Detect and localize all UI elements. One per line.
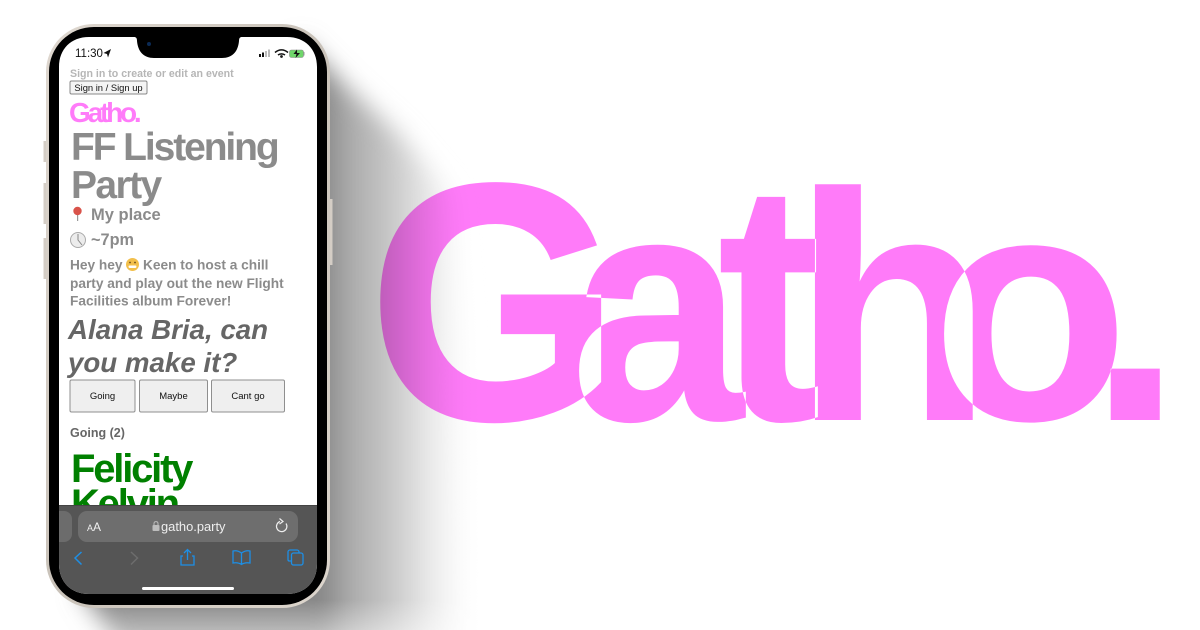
RSVP question: you make it? [66, 347, 237, 378]
going button [70, 380, 135, 412]
cant go button: Cant go [231, 391, 265, 402]
url bar: gatho.party [161, 519, 226, 534]
icon: battery [290, 50, 304, 58]
small Gatho logo: Gatho. [69, 97, 140, 128]
RSVP buttons [70, 380, 284, 412]
icon: forward [131, 552, 138, 564]
Gatho logo wordmark: . [1093, 141, 1178, 482]
phone frame [46, 24, 330, 608]
browser toolbar [40, 505, 317, 595]
event description: Facilities album Forever! [70, 294, 231, 308]
icon: tabs [288, 550, 303, 565]
icon: pin [73, 207, 82, 221]
time row [70, 231, 134, 249]
maybe button: Maybe [159, 391, 188, 402]
icon: location arrow [104, 49, 111, 58]
event title: FF Listening [71, 126, 278, 169]
home indicator [142, 587, 234, 590]
guest names: Kelvin [71, 482, 178, 526]
camera [147, 42, 151, 46]
phone side buttons [44, 141, 332, 279]
RSVP question [66, 314, 268, 378]
web page content [66, 68, 284, 526]
Gatho logo wordmark: a [571, 127, 745, 487]
icon: share [181, 550, 194, 565]
icon: back [75, 552, 82, 564]
url bar [78, 511, 298, 542]
event description [70, 258, 284, 308]
guest names [74, 453, 194, 505]
going button: Going [90, 391, 115, 402]
previous tab edge [59, 511, 72, 542]
Gatho logo wordmark: G [369, 115, 619, 489]
Gatho logo wordmark: o [932, 129, 1129, 488]
event title: Party [71, 164, 162, 207]
icon: grinning emoji [126, 258, 139, 271]
Gatho logo wordmark [360, 113, 1180, 491]
guest names: Felicity [71, 447, 194, 491]
event title [71, 126, 278, 207]
icon: clock [70, 232, 86, 248]
cant go button [212, 380, 284, 412]
phone shadow [60, 40, 490, 630]
sign in prompt: Sign in to create or edit an event [70, 68, 234, 80]
event description: party and play out the new Flight [70, 276, 284, 291]
Gatho logo wordmark: h [793, 127, 992, 489]
icon: wifi [275, 50, 288, 57]
icon: lock [152, 522, 160, 531]
sign in button: Sign in / Sign up [74, 82, 143, 93]
icon: signal [259, 50, 270, 57]
url bar: AA [87, 520, 101, 534]
Gatho logo wordmark: t [718, 113, 821, 491]
status bar [76, 48, 304, 58]
maybe button [140, 380, 208, 412]
going count: Going (2) [70, 426, 125, 440]
phone bezel [49, 27, 327, 605]
screen [40, 37, 317, 595]
icon: reload [276, 518, 287, 532]
status bar: 11:30 [75, 48, 103, 60]
phone [40, 24, 332, 608]
event description: Hey hey [70, 258, 123, 272]
event description: Keen to host a chill [143, 258, 268, 272]
location row: My place [91, 206, 161, 224]
time row: ~7pm [91, 231, 134, 249]
icon: bookmarks [233, 551, 250, 564]
RSVP question: Alana Bria, can [67, 314, 268, 345]
